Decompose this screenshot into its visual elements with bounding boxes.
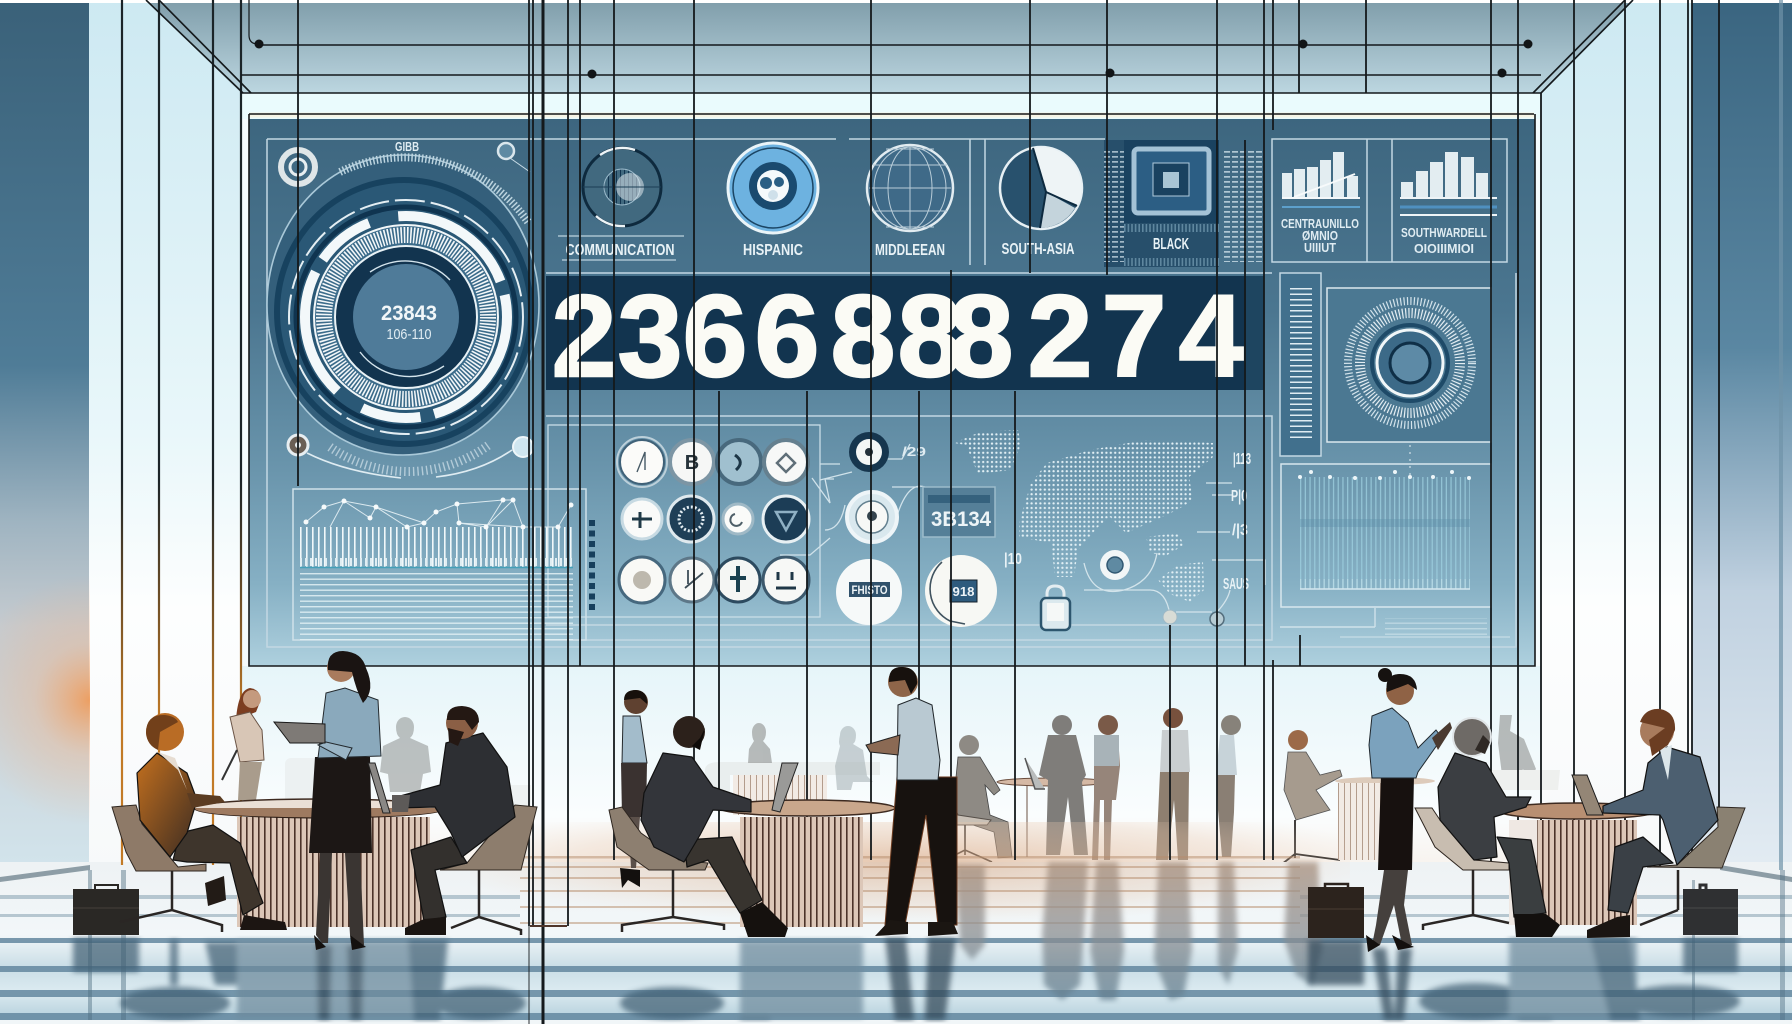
- person: standing woman centre: [866, 667, 958, 936]
- far silhouette: left man: [380, 717, 431, 792]
- label: HISPANIC: [743, 242, 803, 259]
- bar chart two: [1400, 152, 1497, 256]
- map: north-west landmass: [954, 430, 1021, 474]
- person: seated bald man: [609, 716, 798, 937]
- chart labels: [1401, 225, 1487, 256]
- far table left: [285, 758, 531, 860]
- reflection: foreground: [73, 938, 1740, 1020]
- grey chair: [937, 783, 991, 825]
- map pins: [1163, 610, 1224, 626]
- standing woman in skirt: [1092, 715, 1120, 860]
- table three: [1499, 803, 1657, 925]
- chart labels: CENTRAUNILLO: [1281, 216, 1359, 231]
- far table right: [1335, 777, 1435, 860]
- map labels: |113: [1233, 451, 1251, 468]
- icon: row one: [617, 437, 808, 487]
- table two: [719, 800, 895, 927]
- icon: padlock: [1041, 586, 1070, 630]
- table one: [194, 799, 446, 927]
- reflection: background people: [955, 862, 1322, 1000]
- footnote lines: [1280, 608, 1510, 638]
- person: seated man right: [1572, 709, 1745, 938]
- background people: [285, 708, 1560, 864]
- list panel: [1280, 273, 1321, 456]
- far table centre-left: [705, 762, 880, 815]
- concentric radar panel: [1327, 288, 1491, 442]
- briefcase right: [1683, 885, 1738, 935]
- badge: white disc one: FHISTO: [852, 583, 888, 597]
- category: south asia: [1000, 147, 1082, 258]
- category: middle east: [867, 145, 953, 259]
- gauge value: 23843: [381, 302, 437, 325]
- person: standing woman right: [1366, 668, 1452, 952]
- far silhouette: centre-left pair: [748, 723, 873, 790]
- standing woman with papers: [1156, 708, 1190, 860]
- person: older seated man: [1415, 718, 1560, 937]
- gauge top label: GIBB: [395, 139, 419, 154]
- chair: [112, 805, 222, 932]
- map labels: SAUS: [1223, 576, 1249, 593]
- label: hub value: /29: [902, 444, 926, 459]
- chart labels: ØMNIO: [1302, 228, 1338, 243]
- briefcase left: [73, 885, 139, 935]
- centre table: [997, 778, 1107, 857]
- laptop silhouette: [1025, 758, 1045, 789]
- label: COMMUNICATION: [566, 242, 674, 259]
- value box: 3B134: [931, 508, 991, 531]
- gauge panel: [267, 139, 539, 478]
- category: communication: [558, 148, 684, 260]
- icon: row three: [619, 557, 809, 603]
- icon: small target: [281, 150, 315, 184]
- display wall: [249, 114, 1535, 666]
- icon grid panel: [548, 425, 820, 617]
- badge: white disc two: [925, 555, 997, 627]
- background woman with hair: [222, 688, 264, 800]
- icon: middle hub: [847, 492, 897, 542]
- gauge sub-label: 106-110: [386, 326, 432, 343]
- person: standing woman with tablet: [274, 651, 381, 950]
- standing dark man: [1039, 715, 1088, 855]
- ceiling fixtures: [254, 40, 1532, 78]
- connector lines: [780, 444, 925, 555]
- bar chart one: [1281, 152, 1360, 255]
- standing thin man: [1216, 715, 1241, 857]
- map: islands: [1146, 533, 1184, 557]
- label: SOUTH-ASIA: [1002, 241, 1075, 258]
- icon: map target: [1100, 550, 1130, 580]
- value box: [923, 487, 995, 537]
- floor: [0, 822, 1792, 1024]
- data table: [1223, 148, 1262, 262]
- bottom-left line chart panel: [293, 489, 592, 640]
- status dots: [589, 520, 595, 610]
- badge: white disc one: [836, 559, 902, 625]
- far table back right: [1475, 770, 1560, 790]
- world map: [954, 430, 1265, 630]
- badge: white disc two: 918: [952, 584, 974, 599]
- person: woman behind table two: [620, 690, 648, 888]
- category: hispanic: [728, 143, 818, 259]
- headline number: 2366888 274: [552, 271, 1243, 401]
- chart labels: SOUTHWARDELL: [1401, 225, 1487, 240]
- spike chart panel: [1281, 445, 1491, 607]
- seated grey man: [952, 735, 1012, 858]
- briefcase centre: [1308, 884, 1364, 938]
- icon: top hub: [849, 432, 889, 472]
- foreground people and furniture: [73, 651, 1745, 952]
- icon: lower-left dial: [288, 435, 308, 455]
- category: black: [1104, 140, 1219, 267]
- chart labels: OIOIIIMIOI: [1414, 241, 1474, 256]
- circular gauge: [267, 155, 539, 455]
- seated woman: [1284, 730, 1342, 820]
- chart labels: UIIIUT: [1304, 240, 1336, 255]
- person: seated man left: [112, 713, 287, 932]
- label: BLACK: [1153, 236, 1189, 253]
- headline number band: [546, 271, 1264, 401]
- label: box value: |10: [1004, 551, 1022, 568]
- map: southern landmass: [1158, 562, 1204, 602]
- map labels: P|0: [1231, 488, 1247, 505]
- hub icons: [836, 432, 1022, 627]
- icon: small dial: [498, 143, 530, 172]
- label: MIDDLEEAN: [875, 242, 945, 259]
- icon: row two: [622, 496, 809, 542]
- map labels: [1223, 451, 1251, 593]
- seated woman chair: [1282, 820, 1340, 864]
- map: main continent: [1019, 440, 1213, 577]
- far silhouette: right man: [1498, 715, 1536, 783]
- icon: row one: B: [685, 452, 699, 474]
- icon: lower-right bubble: [513, 437, 533, 457]
- panel frame lines: [267, 139, 1516, 647]
- person: seated man with laptop left: [368, 706, 537, 935]
- chart labels: [1281, 216, 1359, 255]
- map labels: /|3: [1232, 522, 1248, 539]
